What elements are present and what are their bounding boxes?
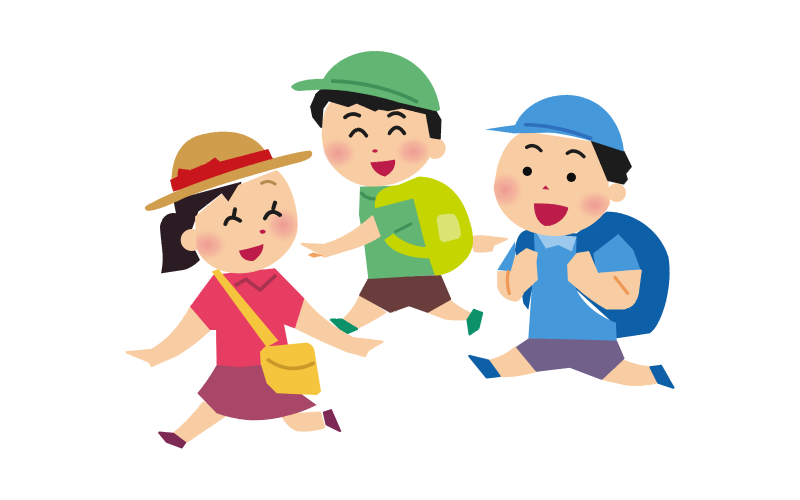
head [494, 132, 610, 236]
hair [311, 87, 440, 138]
ear [607, 183, 626, 202]
mouth [534, 203, 568, 226]
hat ribbon [170, 149, 274, 192]
eyebrow [262, 181, 275, 184]
character: boy in green cap [291, 51, 507, 334]
cap [485, 95, 624, 152]
shoes [159, 410, 340, 447]
hat brim [145, 151, 312, 211]
character: boy in blue cap [469, 95, 673, 388]
illustration: three children running [126, 50, 674, 448]
shoes [331, 310, 482, 334]
ponytail [160, 213, 200, 273]
backpack detail [396, 224, 411, 232]
legs [174, 403, 324, 443]
sleeve line [362, 193, 375, 199]
hair [173, 182, 242, 247]
fingernail [308, 252, 323, 258]
shirt [528, 233, 617, 341]
shorts [360, 276, 450, 312]
face [527, 146, 584, 157]
shorts [517, 339, 623, 379]
mouth [370, 160, 395, 177]
cap [291, 51, 440, 111]
nose [542, 185, 549, 190]
cheeks [196, 210, 298, 258]
arms and fists [498, 249, 641, 308]
backpack [515, 212, 670, 338]
arms [127, 299, 382, 366]
nose [260, 230, 266, 234]
legs [341, 297, 472, 331]
head [322, 95, 430, 187]
collar [235, 275, 276, 290]
backpack [375, 177, 473, 276]
ear [181, 229, 203, 251]
bag [260, 343, 321, 395]
shoes [469, 356, 673, 388]
right sleeve [593, 234, 641, 274]
ear [424, 138, 446, 159]
collar [537, 233, 577, 251]
left sleeve [497, 242, 515, 272]
head [195, 170, 298, 273]
bag strap [212, 269, 278, 347]
skirt [197, 364, 317, 420]
sleeve marks [507, 272, 628, 293]
mouth [239, 244, 263, 261]
far arm [470, 236, 507, 252]
eyes [225, 203, 280, 224]
hat crown [171, 132, 274, 191]
nose [372, 149, 378, 153]
cap seam [526, 125, 591, 138]
legs [491, 347, 656, 385]
eyes [523, 167, 576, 182]
bag flap [268, 360, 313, 368]
near arm [302, 217, 379, 257]
cheeks [494, 175, 610, 216]
face [345, 113, 404, 136]
hair [592, 140, 631, 183]
backpack pocket [437, 214, 461, 242]
shirt [190, 268, 304, 367]
character: girl in straw hat [127, 132, 382, 447]
cap seam [333, 81, 417, 102]
shirt [359, 185, 435, 279]
cheeks [322, 140, 428, 169]
